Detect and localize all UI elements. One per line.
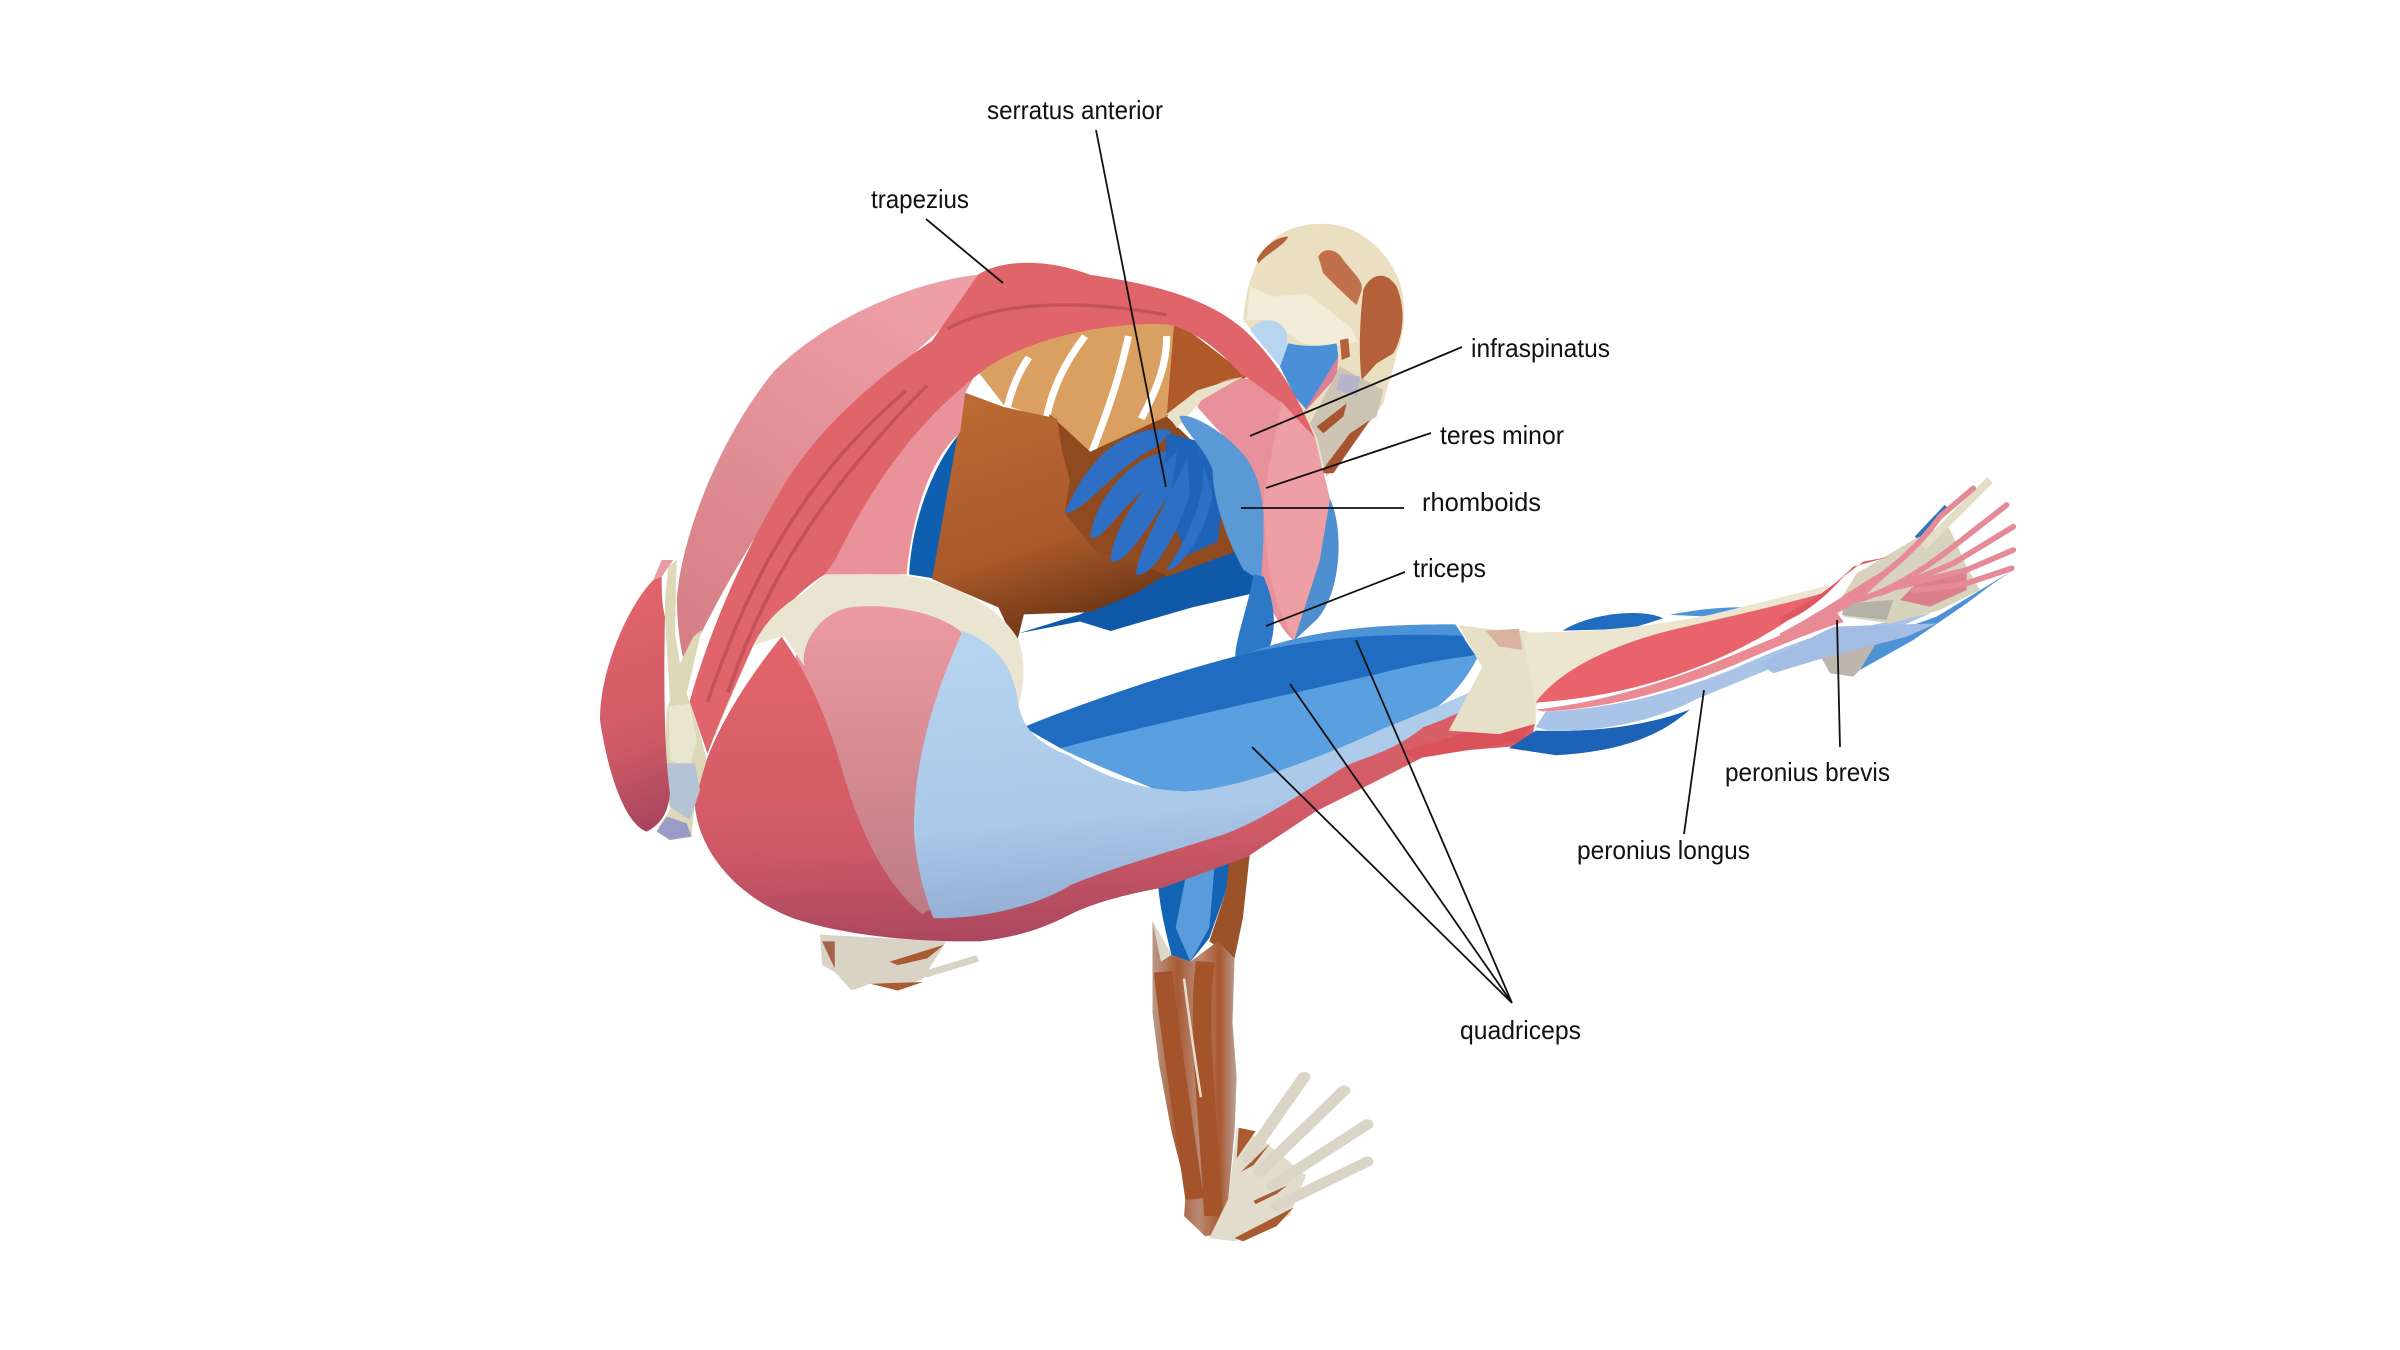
main pink tendon: [1780, 567, 1897, 643]
spine bone: [657, 560, 707, 840]
label: peronius brevis: [1725, 620, 1890, 787]
torso, shoulder and hip muscles: [677, 263, 1536, 941]
label: infraspinatus: infraspinatus: [1471, 333, 1610, 363]
upper brown muscle: [1167, 320, 1248, 416]
label: quadriceps: [1252, 640, 1581, 1045]
heel: [1822, 640, 1880, 677]
label: serratus anterior: [987, 95, 1166, 487]
trapezius red band: [690, 263, 1315, 754]
top blue quadriceps head: [1248, 624, 1465, 653]
cream fill between band and pelvis: [708, 574, 886, 754]
left hip, spine and pelvis detail: [600, 560, 707, 840]
label: triceps: triceps: [1413, 553, 1486, 583]
shoulder light strip: [1264, 402, 1330, 640]
thigh and quadriceps: [1023, 624, 1536, 792]
labels and leader lines: [871, 95, 1890, 1045]
knee and lower leg: [1449, 585, 1931, 755]
triceps: [1235, 574, 1274, 659]
pink tendons: [1536, 613, 1844, 711]
label: teres minor: teres minor: [1440, 420, 1564, 450]
dark blue underside: [1019, 541, 1253, 633]
label: infraspinatus: [1250, 333, 1610, 436]
outer blue strip: [1860, 570, 2013, 670]
left hip red: [600, 577, 670, 832]
brown behind serratus: [1049, 414, 1238, 577]
label: rhomboids: rhomboids: [1422, 487, 1541, 517]
knee bones: [1449, 625, 1556, 734]
label: teres minor: [1266, 420, 1564, 488]
latissimus brown: [932, 393, 1167, 645]
lower red knee tendons: [1402, 717, 1536, 759]
red band: [1780, 557, 1890, 623]
peronius band: [1536, 613, 1931, 731]
peronius tendons: [1760, 623, 1937, 673]
label: peronius longus: [1577, 690, 1750, 865]
calf red muscle: [1536, 594, 1820, 703]
label: peronius brevis: peronius brevis: [1725, 757, 1890, 787]
glute pink: [779, 593, 973, 923]
inner thigh light blue: [914, 631, 1532, 918]
forearm: [1152, 921, 1237, 1236]
upper leg blue: [1563, 613, 1663, 631]
label: trapezius: [871, 184, 1003, 283]
upper arm blue muscles: [1157, 846, 1251, 962]
big toe bone: [1923, 480, 1990, 547]
pale bump above hip: [653, 560, 673, 580]
outer blue arm: [1294, 499, 1339, 640]
toes pink tendons: [1847, 488, 2013, 600]
label: serratus anterior: serratus anterior: [987, 95, 1163, 125]
hand and fingers: [1209, 1077, 1367, 1241]
big red glute and under-thigh: [695, 637, 1536, 941]
neck light blue: [1250, 320, 1288, 367]
dark blue quadriceps head: [1023, 635, 1475, 748]
inner pink: [820, 353, 988, 574]
dark blue wedge: [909, 433, 960, 579]
mid blue quadriceps head: [1060, 655, 1479, 792]
large pink back muscle: [677, 275, 978, 664]
lower supporting arm and hand: [1152, 846, 1367, 1241]
lower leg dark blue: [1509, 710, 1690, 755]
neck blue: [1280, 343, 1338, 410]
pink neck strip: [1303, 357, 1338, 413]
shin bone: [1522, 585, 1830, 706]
label: quadriceps: quadriceps: [1460, 1015, 1581, 1045]
label: peronius longus: peronius longus: [1577, 835, 1750, 865]
foot: [1760, 480, 2013, 677]
scapula bone: [1167, 376, 1243, 428]
serratus anterior fingers: [1065, 429, 1223, 575]
pelvic bone arc: [753, 574, 1023, 711]
shoulder pink: [1197, 378, 1330, 640]
pale jaw plate: [1247, 287, 1358, 347]
vertebra detail: [668, 703, 697, 767]
midfoot bones: [1840, 523, 1980, 623]
label: triceps: [1266, 553, 1486, 626]
rib cage: [978, 320, 1177, 461]
upper hand under hip: [820, 935, 978, 991]
lower neck details: [1310, 367, 1383, 477]
central pink mass: [1900, 573, 1967, 607]
rhomboid blue: [1179, 416, 1264, 581]
toe blue stub: [1917, 507, 1947, 538]
head and neck: [1243, 224, 1404, 477]
label: trapezius: trapezius: [871, 184, 969, 214]
skull: [1243, 224, 1404, 477]
head muscle patches: [1257, 237, 1403, 380]
